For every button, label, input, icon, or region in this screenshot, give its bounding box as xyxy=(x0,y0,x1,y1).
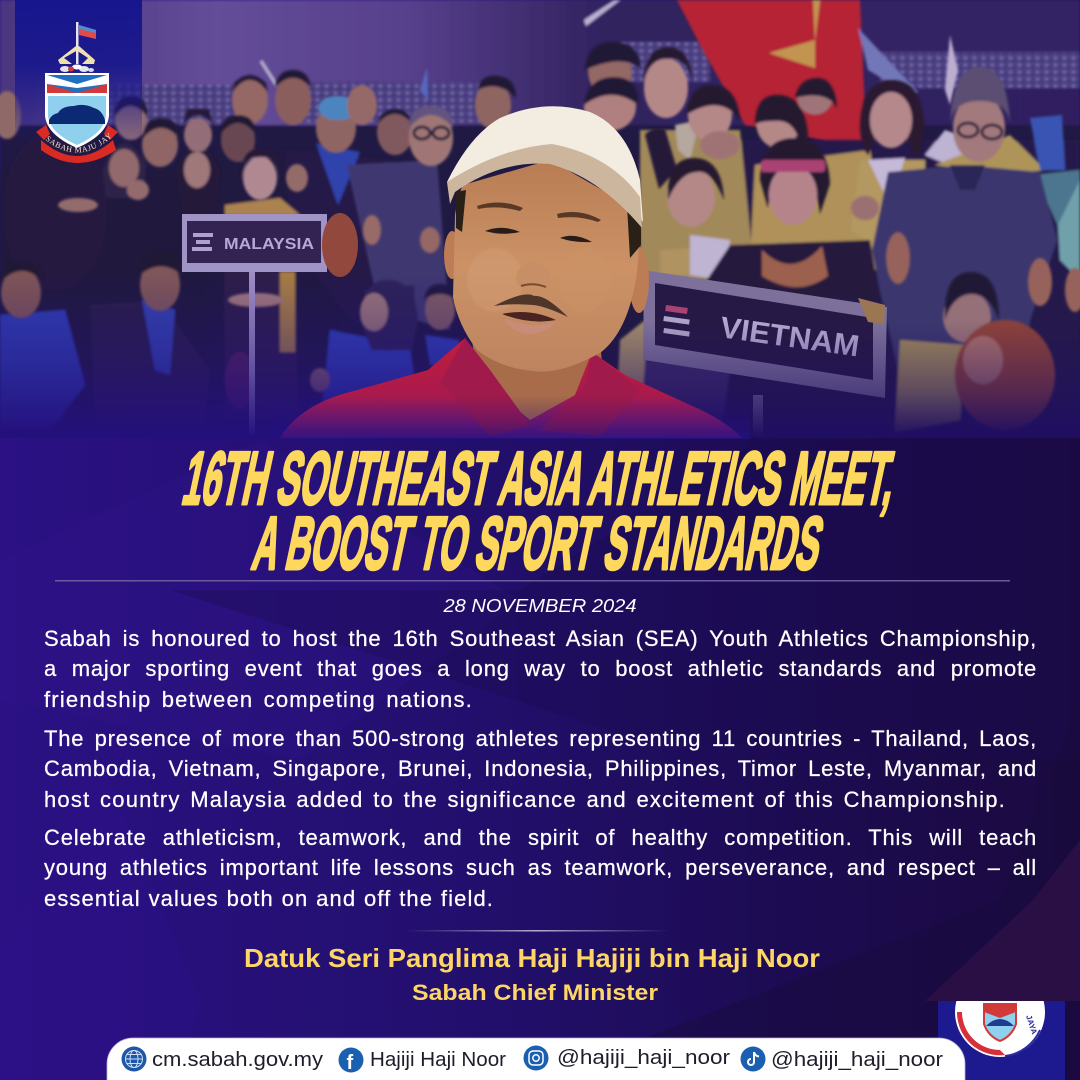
crest hands xyxy=(58,46,95,64)
photo: athletes crowd at stadium xyxy=(0,0,1080,445)
hair xyxy=(456,190,466,232)
face xyxy=(453,160,639,372)
footer: website xyxy=(122,1046,323,1072)
fade to background xyxy=(0,283,473,438)
sign: Vietnam xyxy=(643,270,887,437)
paragraph 3: young athletics important life lessons such as teamwork, perseverance, and respect – all xyxy=(44,855,1037,880)
glasses xyxy=(414,127,449,139)
footer: facebook: f xyxy=(346,1052,354,1074)
glasses xyxy=(958,123,1002,139)
paragraph 2: host country Malaysia added to the significance and excitement of this Championship. xyxy=(44,787,1006,812)
eyes and brows xyxy=(477,202,601,242)
stadium sky and stands xyxy=(0,0,1080,374)
paragraph 2: The presence of more than 500-strong athletes representing 11 countries - Thailand, Laos, xyxy=(44,726,1037,751)
left crowd faces xyxy=(0,70,516,392)
badge: bottom-right round logo xyxy=(938,1001,1065,1080)
paragraph 1: a major sporting event that goes a long way to boost athletic standards and promote xyxy=(44,656,1037,681)
shield xyxy=(45,73,109,148)
sign: Malaysia: MALAYSIA xyxy=(224,236,314,253)
signatory role: Sabah Chief Minister xyxy=(412,980,658,1005)
footer: website: cm.sabah.gov.my xyxy=(152,1049,323,1071)
badge: bottom-right round logo: JAYA xyxy=(1024,1014,1039,1036)
footer: instagram xyxy=(524,1046,730,1070)
mouth xyxy=(502,312,556,322)
neck xyxy=(472,340,606,425)
sign: Vietnam: VIETNAM xyxy=(718,311,861,363)
flag and pole xyxy=(76,22,96,64)
footer: facebook xyxy=(338,1048,506,1074)
paragraph 2: Cambodia, Vietnam, Singapore, Brunei, Indonesia, Philippines, Timor Leste, Myanmar, and xyxy=(44,756,1037,781)
nose xyxy=(516,261,550,287)
paragraph 1 xyxy=(44,626,1037,712)
signatory name: Datuk Seri Panglima Haji Hajiji bin Haji Noor xyxy=(244,943,820,973)
paragraph 3: essential values both on and off the field. xyxy=(44,886,494,911)
title xyxy=(176,437,904,586)
paragraph 2 xyxy=(44,726,1037,812)
red shirt xyxy=(280,338,742,438)
Vietnam flag xyxy=(677,0,958,155)
footer pill xyxy=(107,1038,965,1080)
shirt fade xyxy=(270,395,750,439)
footer: facebook: Hajiji Haji Noor xyxy=(370,1049,506,1071)
moustache xyxy=(494,294,568,317)
date: 28 NOVEMBER 2024 xyxy=(442,595,636,616)
white cap xyxy=(447,106,643,222)
paragraph 3 xyxy=(44,825,1037,911)
logo panel: Sabah state crest xyxy=(15,0,142,163)
portrait: Chief Minister in white cap and red shirt xyxy=(270,106,750,439)
paragraph 1: Sabah is honoured to host the 16th Southeast Asian (SEA) Youth Athletics Championship, xyxy=(44,626,1037,651)
paragraph 3: Celebrate athleticism, teamwork, and the spirit of healthy competition. This will teach xyxy=(44,825,1037,850)
right crowd bodies xyxy=(615,115,1080,440)
paragraph 1: friendship between competing nations. xyxy=(44,687,473,712)
ears xyxy=(444,231,460,279)
left crowd bodies xyxy=(0,130,460,440)
footer: tiktok xyxy=(740,1046,943,1072)
footer: tiktok: @hajiji_haji_noor xyxy=(771,1049,943,1071)
sign: Malaysia xyxy=(182,213,358,435)
footer: instagram: @hajiji_haji_noor xyxy=(557,1047,730,1069)
right crowd faces xyxy=(584,42,1080,343)
purple tint over crowd xyxy=(0,0,1080,438)
scroll with motto xyxy=(36,125,118,140)
orangutan plush xyxy=(955,320,1055,430)
